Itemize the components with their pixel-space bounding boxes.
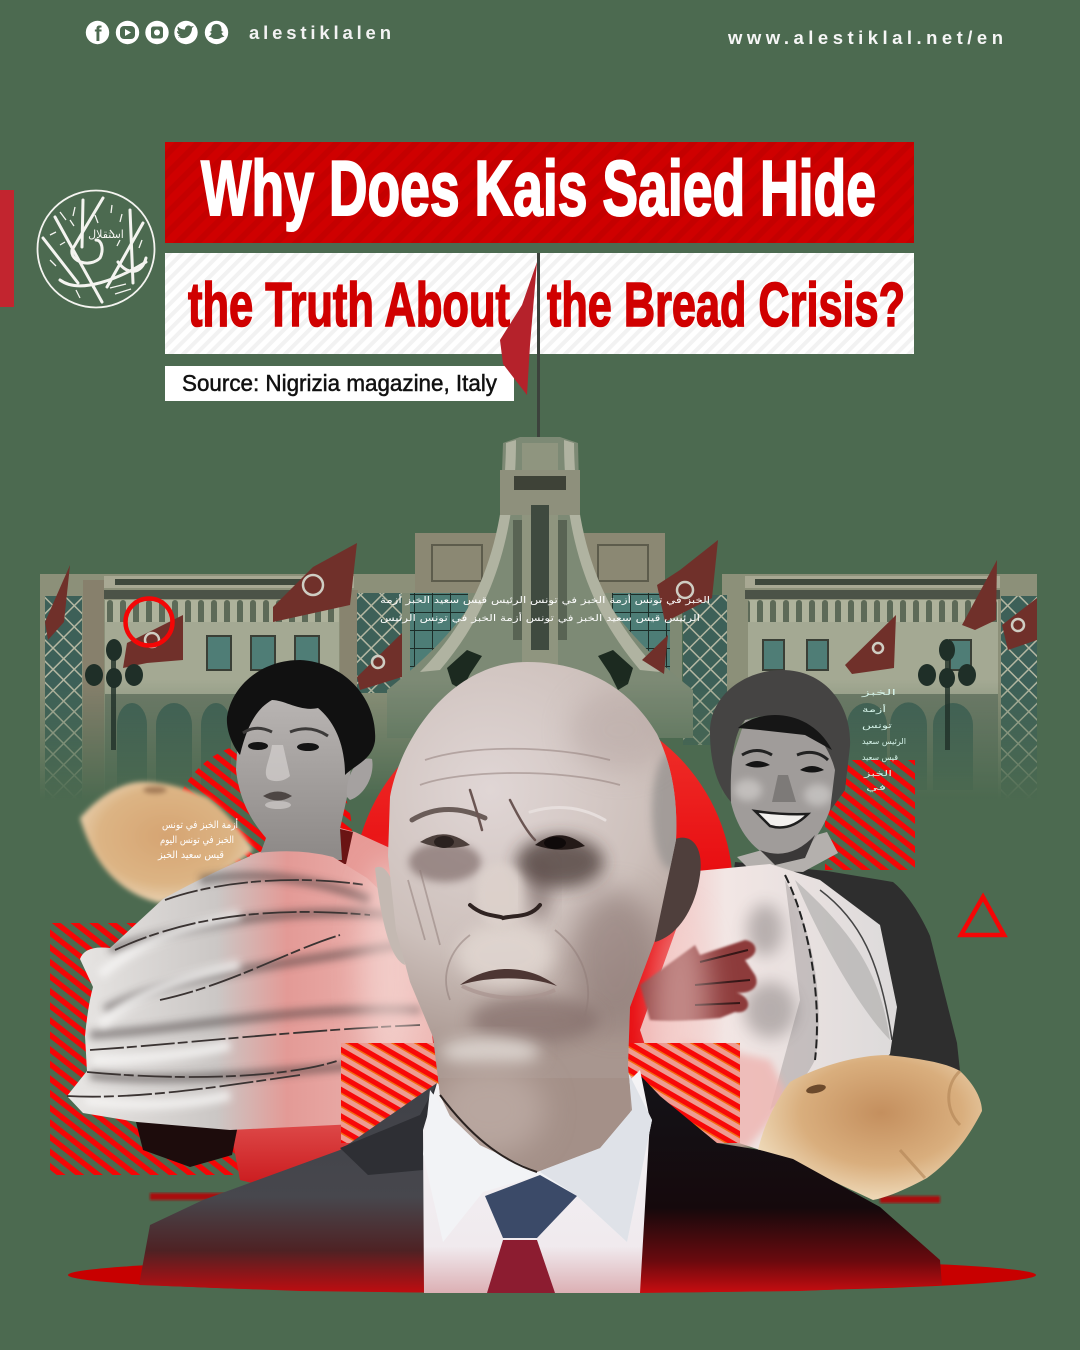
face shading bbox=[409, 690, 692, 1178]
arabic text overlay centre bbox=[380, 594, 710, 624]
striped half circle left bbox=[172, 742, 352, 922]
neck crease bbox=[440, 1095, 537, 1172]
neck and face bbox=[236, 695, 352, 860]
arabic text overlay right: أزمة bbox=[862, 704, 886, 714]
lamp posts bbox=[85, 639, 976, 750]
logo bbox=[38, 190, 154, 308]
fold lines bbox=[67, 880, 420, 1097]
arabic text overlay left bbox=[157, 818, 238, 861]
floating bread right bbox=[758, 1055, 982, 1200]
eyes bbox=[745, 761, 824, 772]
right wing bbox=[683, 574, 1037, 824]
red scribbles bbox=[150, 1193, 940, 1203]
arabic text overlay right bbox=[860, 688, 906, 792]
bread held by right boy bbox=[640, 864, 897, 1150]
flag emblems bbox=[145, 575, 1024, 668]
suit left bbox=[139, 1083, 470, 1293]
eyes and brows bbox=[248, 742, 319, 751]
pink lower bread bbox=[680, 1040, 790, 1150]
title line 2 box: the Truth About bbox=[188, 271, 510, 340]
source label: Source: Nigrizia magazine, Italy bbox=[182, 370, 497, 396]
large red circle behind president bbox=[353, 700, 733, 1080]
ear right bbox=[650, 838, 701, 942]
arabic text overlay left: الخبز في تونس اليوم bbox=[160, 835, 234, 846]
arabic text overlay right: الخبز bbox=[862, 769, 892, 778]
ear left bbox=[375, 867, 405, 965]
handle: alestiklalen bbox=[249, 22, 391, 43]
pink fade beside president left bbox=[360, 860, 420, 1080]
body below bread stack left bbox=[225, 1090, 420, 1195]
arabic text overlay right: الخبز bbox=[860, 688, 896, 697]
nose bbox=[772, 775, 796, 802]
hair bbox=[227, 660, 375, 775]
triangle outline bbox=[961, 897, 1004, 935]
striped rectangle centre bbox=[341, 1043, 740, 1143]
bottom red ellipse bbox=[68, 1257, 1036, 1293]
source label bbox=[165, 366, 514, 401]
red side bar bbox=[0, 190, 14, 307]
hand on bread bbox=[640, 940, 757, 1021]
suit right bbox=[610, 1075, 942, 1293]
shirt bbox=[240, 828, 420, 1130]
boy on right bbox=[710, 670, 960, 1071]
head and neck bbox=[388, 662, 676, 1172]
collar bbox=[737, 832, 838, 872]
bread stack on left bbox=[67, 851, 440, 1130]
striped rectangle right bbox=[825, 760, 915, 870]
social media icons: f bbox=[94, 23, 102, 46]
beanie bbox=[710, 670, 850, 811]
shirt bbox=[423, 1070, 650, 1293]
collars bbox=[423, 1070, 652, 1242]
building flags bbox=[45, 540, 1037, 690]
eyes bbox=[420, 834, 585, 850]
hair fringe bbox=[738, 715, 832, 750]
nose and mouth bbox=[266, 745, 290, 781]
title line 2 box: the Bread Crisis? bbox=[547, 271, 905, 340]
brows bbox=[412, 790, 605, 840]
arabic text overlay left: قيس سعيد الخبز bbox=[157, 850, 224, 861]
lapel left bbox=[340, 1083, 437, 1175]
title line 2 box bbox=[165, 253, 914, 354]
arabic text overlay right: في bbox=[866, 783, 886, 792]
government building bbox=[40, 437, 1037, 824]
president bbox=[139, 662, 942, 1293]
necktie bbox=[485, 1175, 577, 1293]
fold highlights bbox=[85, 915, 240, 1105]
striped rectangle left bbox=[50, 923, 240, 1175]
arabic text overlay right: تونس bbox=[862, 721, 892, 730]
neck and face bbox=[728, 715, 838, 858]
arabic text overlay right: الرئيس سعيد bbox=[862, 737, 906, 746]
arabic text overlay centre: الرئيس قيس سعيد الخبز في تونس أزمة الخبز في تونس الرئيس bbox=[380, 612, 700, 624]
social media icons bbox=[86, 21, 228, 46]
pink fade beside president right bbox=[650, 910, 710, 1110]
left wing bbox=[40, 574, 415, 790]
sweater bbox=[730, 862, 960, 1071]
central block bbox=[357, 533, 682, 703]
website url: www.alestiklal.net/en bbox=[727, 27, 1003, 48]
dark sleeve under bread bbox=[135, 1115, 240, 1167]
mouth bbox=[755, 811, 808, 828]
wrinkles bbox=[408, 749, 620, 1015]
boy on left bbox=[227, 660, 420, 1130]
ear bbox=[347, 758, 373, 800]
red ring marker bbox=[126, 598, 172, 646]
arabic text overlay centre: الخبز في تونس أزمة الخبز في تونس الرئيس قيس سعيد الخبز أزمة bbox=[380, 594, 710, 606]
title line 1 box bbox=[165, 142, 914, 243]
central monument bbox=[387, 437, 693, 738]
floating bread left bbox=[80, 782, 253, 903]
logo: استقلال bbox=[88, 228, 124, 241]
fold shading bbox=[90, 876, 420, 1078]
mouth bbox=[460, 969, 557, 998]
nose bbox=[470, 905, 540, 918]
arabic text overlay left: أزمة الخبز في تونس bbox=[162, 818, 238, 831]
flag on pole bbox=[500, 253, 540, 443]
arabic text overlay right: قيس سعيد bbox=[862, 753, 898, 762]
